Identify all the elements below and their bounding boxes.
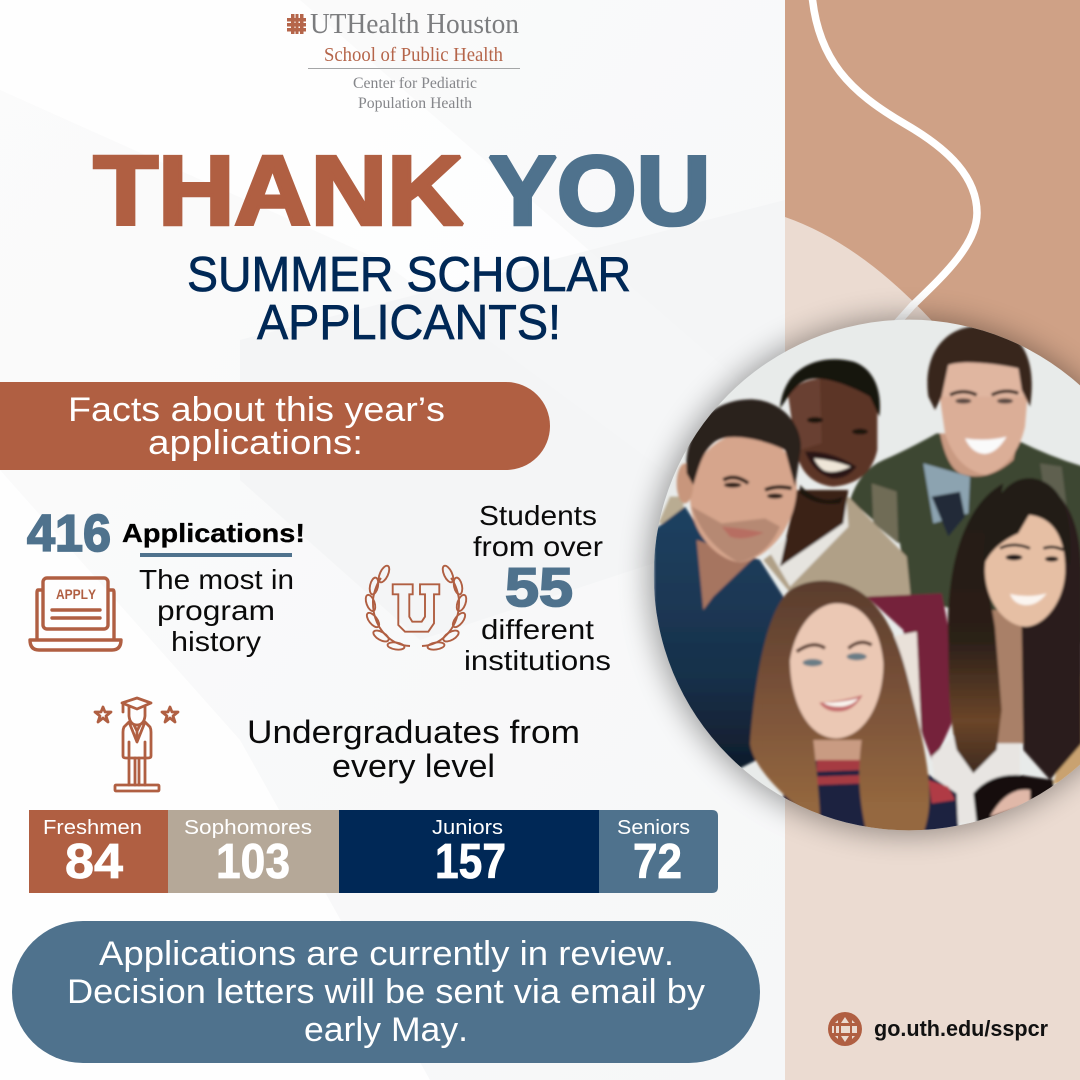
subtitle [187,248,631,350]
segment: juniors: Juniors [432,817,503,839]
institutions text: from over [473,531,603,562]
class level bar [29,810,718,893]
review callout: Decision letters will be sent via email by [67,973,705,1011]
undergraduates heading: every level [332,748,495,784]
stat: 55 institutions [364,500,611,676]
icon: globe [828,1012,862,1046]
undergraduates heading [247,714,580,784]
hair cap [994,478,1060,534]
segment: juniors [339,810,599,893]
segment: seniors: 72 [633,835,682,889]
segment: sophomores [168,810,339,893]
institutions text: institutions [464,645,611,676]
facts banner: applications: [148,424,363,462]
icon: laptop apply: APPLY [56,586,97,602]
back center student [763,359,911,597]
subtitle: APPLICANTS! [257,296,561,350]
icon: laurel wreath with U [364,564,468,651]
applications label: Applications! [122,518,305,548]
right hair [1022,480,1080,780]
segment: freshmen [29,810,168,893]
left front student [654,399,801,777]
center name [353,75,477,112]
segment: sophomores: Sophomores [184,817,312,839]
photo shadow [649,318,1080,834]
description: history [171,626,261,657]
url: go.uth.edu/sspcr [874,1016,1048,1041]
logo name: UTHealth Houston [310,8,519,40]
segment: freshmen: Freshmen [43,817,142,839]
segment: sophomores: 103 [216,835,290,889]
facts banner [0,382,550,470]
decorative white curve [812,0,977,325]
right front student [867,478,1080,825]
front center student [750,581,958,833]
segment: freshmen: 84 [65,835,123,889]
icon: laptop apply [30,578,121,650]
review callout [12,921,760,1063]
number 55: 55 [505,556,573,618]
institutions text [464,500,611,676]
undergraduates heading: Undergraduates from [247,714,580,750]
left hair [948,483,1003,773]
title [94,136,710,246]
institutions text: different [481,614,594,645]
right panel [785,0,1080,1080]
segment: juniors: 157 [435,835,506,889]
segment: seniors [599,810,718,893]
title: THANK [94,136,464,246]
stat: 416 applications [27,505,305,657]
description: The most in [139,564,294,595]
website link [828,1012,1048,1046]
icon: graduate with stars [95,698,178,791]
school name: School of Public Health [324,44,503,66]
institutions text: Students [479,500,597,531]
segment: seniors: Seniors [617,817,690,839]
description: program [157,595,275,626]
subtitle: SUMMER SCHOLAR [187,248,631,302]
facts banner: Facts about this year’s [68,391,445,429]
center name: Center for Pediatric [353,75,477,92]
title: YOU [488,136,710,246]
description [139,564,294,657]
back right student [850,326,1080,643]
icon: logo mark [287,14,306,34]
review callout: early May. [304,1011,468,1049]
review callout: Applications are currently in review. [99,935,674,973]
photo: group of five students [640,310,1080,843]
center name: Population Health [358,95,472,112]
left background [0,0,785,1080]
number 416: 416 [27,505,111,563]
logo [287,8,520,112]
